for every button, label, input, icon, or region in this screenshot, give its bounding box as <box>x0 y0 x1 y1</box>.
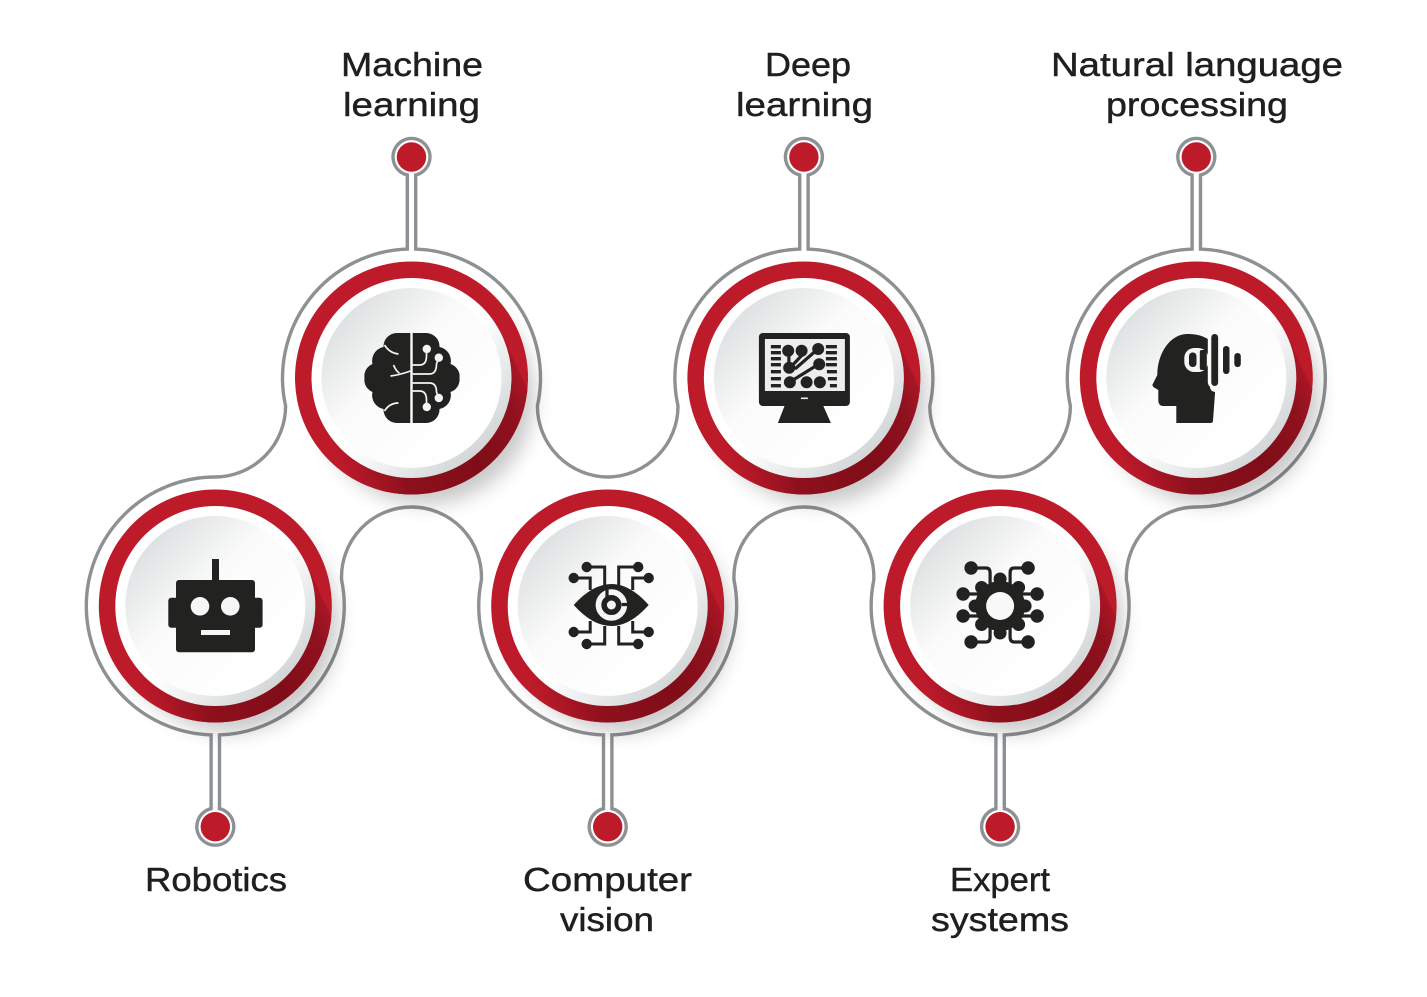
label: machine learning: learning <box>343 86 480 123</box>
label: natural language processing <box>1051 46 1343 123</box>
marker dot: natural language processing <box>1182 142 1211 172</box>
icon: robot <box>168 559 263 652</box>
connector outline <box>86 138 1325 845</box>
marker dot: robotics <box>201 812 230 841</box>
node: robotics <box>99 490 362 771</box>
node: deep learning <box>687 262 951 543</box>
label: expert systems: systems <box>931 901 1069 938</box>
marker dot: computer vision <box>593 812 622 841</box>
icon: head with sound <box>1152 333 1241 423</box>
node: machine learning <box>295 262 558 543</box>
marker dot: machine learning <box>397 142 426 172</box>
label: computer vision: vision <box>560 901 654 938</box>
label: computer vision: Computer <box>523 861 692 898</box>
label: expert systems: Expert <box>950 861 1050 898</box>
label: natural language processing: Natural language <box>1051 46 1343 83</box>
label: deep learning: Deep <box>765 46 851 83</box>
marker dot: deep learning <box>789 142 819 172</box>
icon: brain <box>364 333 460 423</box>
icon: gear with circuit <box>956 561 1044 649</box>
marker dot: expert systems <box>985 812 1015 841</box>
label: computer vision <box>523 861 692 938</box>
label: deep learning: learning <box>736 86 873 123</box>
icon: monitor with circuit <box>759 333 850 423</box>
node: natural language processing <box>1080 262 1343 543</box>
label: expert systems <box>931 861 1069 938</box>
node: computer vision <box>491 490 755 771</box>
node: expert systems <box>884 490 1147 771</box>
icon: eye with circuit <box>568 562 654 649</box>
label: machine learning: Machine <box>341 46 483 83</box>
label: robotics: Robotics <box>145 861 287 898</box>
label: machine learning <box>341 46 483 123</box>
label: natural language processing: processing <box>1106 86 1288 123</box>
label: deep learning <box>736 46 873 123</box>
